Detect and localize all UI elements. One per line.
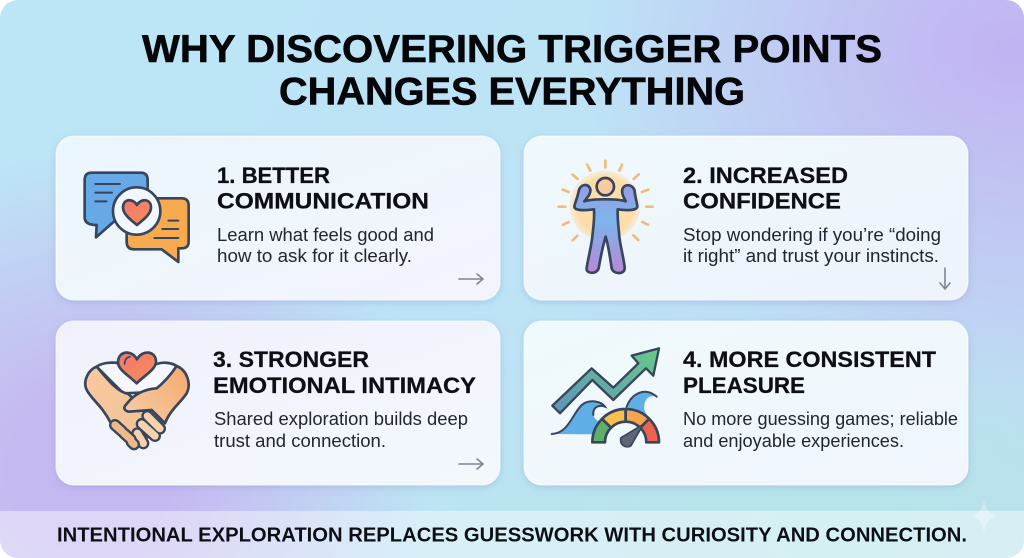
icon: confident figure with sun: [559, 161, 653, 273]
heading: COMMUNICATION: [217, 188, 429, 214]
icon: chat bubbles with heart: [85, 173, 189, 262]
body text: [683, 409, 958, 451]
heading: [213, 347, 476, 398]
body text: Shared exploration builds deep: [214, 409, 468, 429]
title: [142, 28, 882, 114]
heading: 2. INCREASED: [683, 163, 848, 188]
title: WHY DISCOVERING TRIGGER POINTS: [142, 28, 882, 71]
arrow: [940, 268, 950, 289]
arrow: [459, 274, 483, 284]
body text: [217, 225, 434, 266]
panel: more consistent pleasure: [524, 321, 968, 485]
heading: EMOTIONAL INTIMACY: [213, 373, 476, 398]
icon: handshake with heart: [85, 353, 189, 445]
body text: [214, 409, 468, 451]
icon: sparkle: [970, 500, 998, 533]
body text: [683, 225, 941, 266]
arrow: [459, 459, 483, 469]
heading: PLEASURE: [683, 373, 805, 398]
body text: how to ask for it clearly.: [217, 246, 412, 266]
body text: it right” and trust your instincts.: [683, 246, 939, 266]
panel: better communication: [56, 136, 500, 300]
body text: and enjoyable experiences.: [683, 431, 904, 451]
heading: 3. STRONGER: [213, 347, 369, 372]
footer text: INTENTIONAL EXPLORATION REPLACES GUESSWORK WITH CURIOSITY AND CONNECTION.: [57, 524, 967, 546]
heading: [217, 163, 429, 214]
body text: Learn what feels good and: [217, 225, 434, 245]
heading: [683, 347, 936, 398]
panel: stronger emotional intimacy: [56, 321, 500, 485]
icon: rising arrow, waves and gauge: [552, 348, 659, 447]
heading: 1. BETTER: [217, 163, 330, 188]
body text: No more guessing games; reliable: [683, 409, 958, 429]
body text: trust and connection.: [214, 431, 386, 451]
panel: increased confidence: [524, 136, 968, 300]
footer band: [0, 511, 1024, 558]
title: CHANGES EVERYTHING: [279, 70, 745, 114]
heading: CONFIDENCE: [683, 188, 841, 214]
body text: Stop wondering if you’re “doing: [683, 225, 941, 245]
heading: 4. MORE CONSISTENT: [683, 347, 936, 372]
heading: [683, 163, 848, 214]
